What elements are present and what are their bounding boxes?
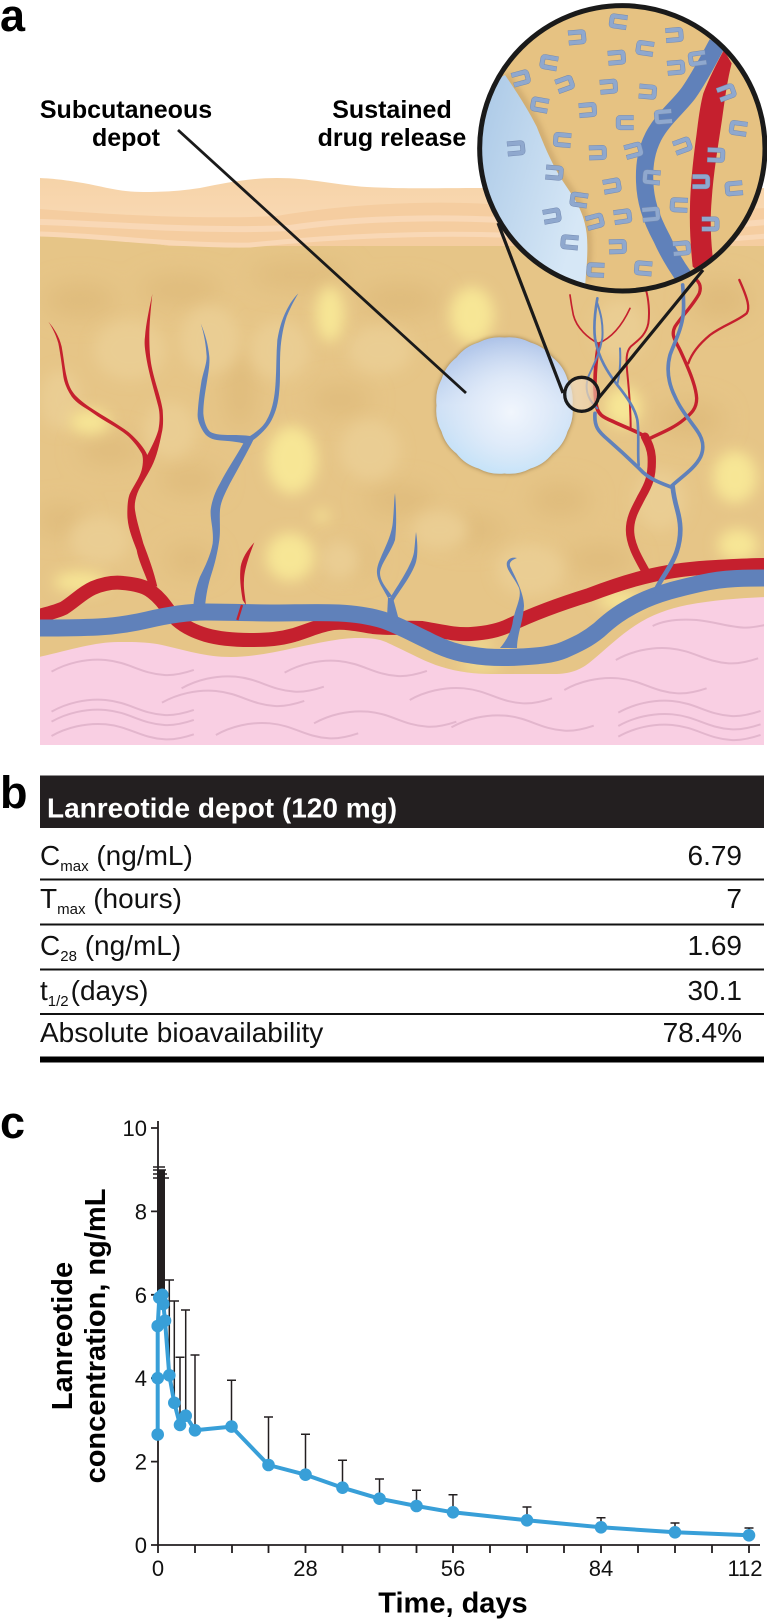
left vessels	[48, 293, 298, 620]
row bioavailability: 78.4%	[663, 1017, 742, 1048]
right vessels	[570, 280, 748, 592]
row C28: 28	[60, 948, 77, 965]
row C28: 1.69	[688, 930, 742, 961]
row Tmax	[40, 883, 742, 918]
inset: vein	[645, 43, 717, 278]
inset: artery	[690, 50, 732, 270]
row Cmax	[40, 840, 742, 875]
row C28: C	[40, 930, 60, 961]
y axis title: Lanreotide	[47, 1262, 79, 1410]
x tick labels: 28	[293, 1556, 318, 1581]
dermis wave lines	[52, 620, 767, 740]
y tick labels: 8	[135, 1200, 147, 1224]
callout line to depot	[178, 130, 466, 393]
row bioavailability	[40, 1017, 742, 1048]
row Cmax: 6.79	[688, 840, 742, 871]
error bars	[153, 1167, 754, 1535]
row bioavailability: Absolute bioavailability	[40, 1017, 323, 1048]
axes and ticks	[151, 1121, 760, 1553]
callout: subcutaneous depot label: Subcutaneous	[40, 96, 212, 124]
fat layer	[36, 225, 767, 675]
y tick labels: 6	[135, 1283, 147, 1308]
middle vein branches	[377, 493, 524, 648]
row Tmax: max	[57, 901, 86, 918]
main artery	[39, 565, 767, 640]
y tick labels: 4	[135, 1366, 147, 1391]
y tick labels: 0	[135, 1533, 147, 1558]
callout: sustained drug release label: Sustained	[332, 96, 452, 124]
row half-life: t	[40, 975, 48, 1006]
row Tmax: T	[40, 883, 57, 914]
panel: PK table	[40, 776, 764, 1062]
x tick labels: 112	[727, 1556, 763, 1581]
magnifier lines	[498, 223, 703, 400]
x tick labels	[152, 1556, 763, 1581]
row half-life: (days)	[71, 975, 148, 1006]
x tick labels: 0	[152, 1556, 164, 1581]
row Cmax: max	[60, 858, 89, 875]
y tick labels	[123, 1116, 147, 1558]
row Cmax: C	[40, 840, 60, 871]
y axis title line 2: concentration, ng/mL	[80, 1189, 112, 1483]
inset: magnified drug release	[460, 6, 765, 300]
row Tmax: (hours)	[85, 883, 182, 914]
row C28	[40, 930, 742, 965]
y tick labels: 10	[123, 1116, 147, 1141]
callout: subcutaneous depot label line 2: depot	[92, 124, 161, 152]
row C28: (ng/mL)	[77, 930, 181, 961]
data line	[158, 1295, 749, 1535]
callout: sustained drug release label line 2: drug release	[318, 124, 466, 152]
small magnifier circle	[565, 377, 599, 411]
panel label b: b	[0, 767, 28, 818]
row half-life: 30.1	[688, 975, 742, 1006]
row half-life: 1/2	[48, 993, 69, 1010]
x axis title: Time, days	[378, 1588, 528, 1620]
table header: Lanreotide depot (120 mg)	[47, 792, 397, 824]
inset: depot edge	[482, 75, 588, 284]
line chart: lanreotide concentration over time	[47, 1116, 763, 1620]
epidermis skin layers	[40, 178, 767, 246]
x tick labels: 84	[589, 1556, 613, 1581]
row Tmax: 7	[726, 883, 742, 914]
inset shading	[505, 75, 587, 280]
main vein	[39, 578, 767, 658]
dermis pink layer	[39, 597, 767, 750]
row half-life	[40, 975, 742, 1010]
data markers	[151, 1288, 755, 1542]
x tick labels: 56	[441, 1556, 465, 1581]
table header	[40, 776, 764, 828]
subcutaneous depot	[436, 337, 573, 474]
panel label c: c	[0, 1097, 25, 1148]
panel: skin cross-section illustration	[36, 178, 767, 750]
row Cmax: (ng/mL)	[89, 840, 193, 871]
inset: drug molecules	[507, 16, 748, 275]
y tick labels: 2	[135, 1450, 147, 1474]
